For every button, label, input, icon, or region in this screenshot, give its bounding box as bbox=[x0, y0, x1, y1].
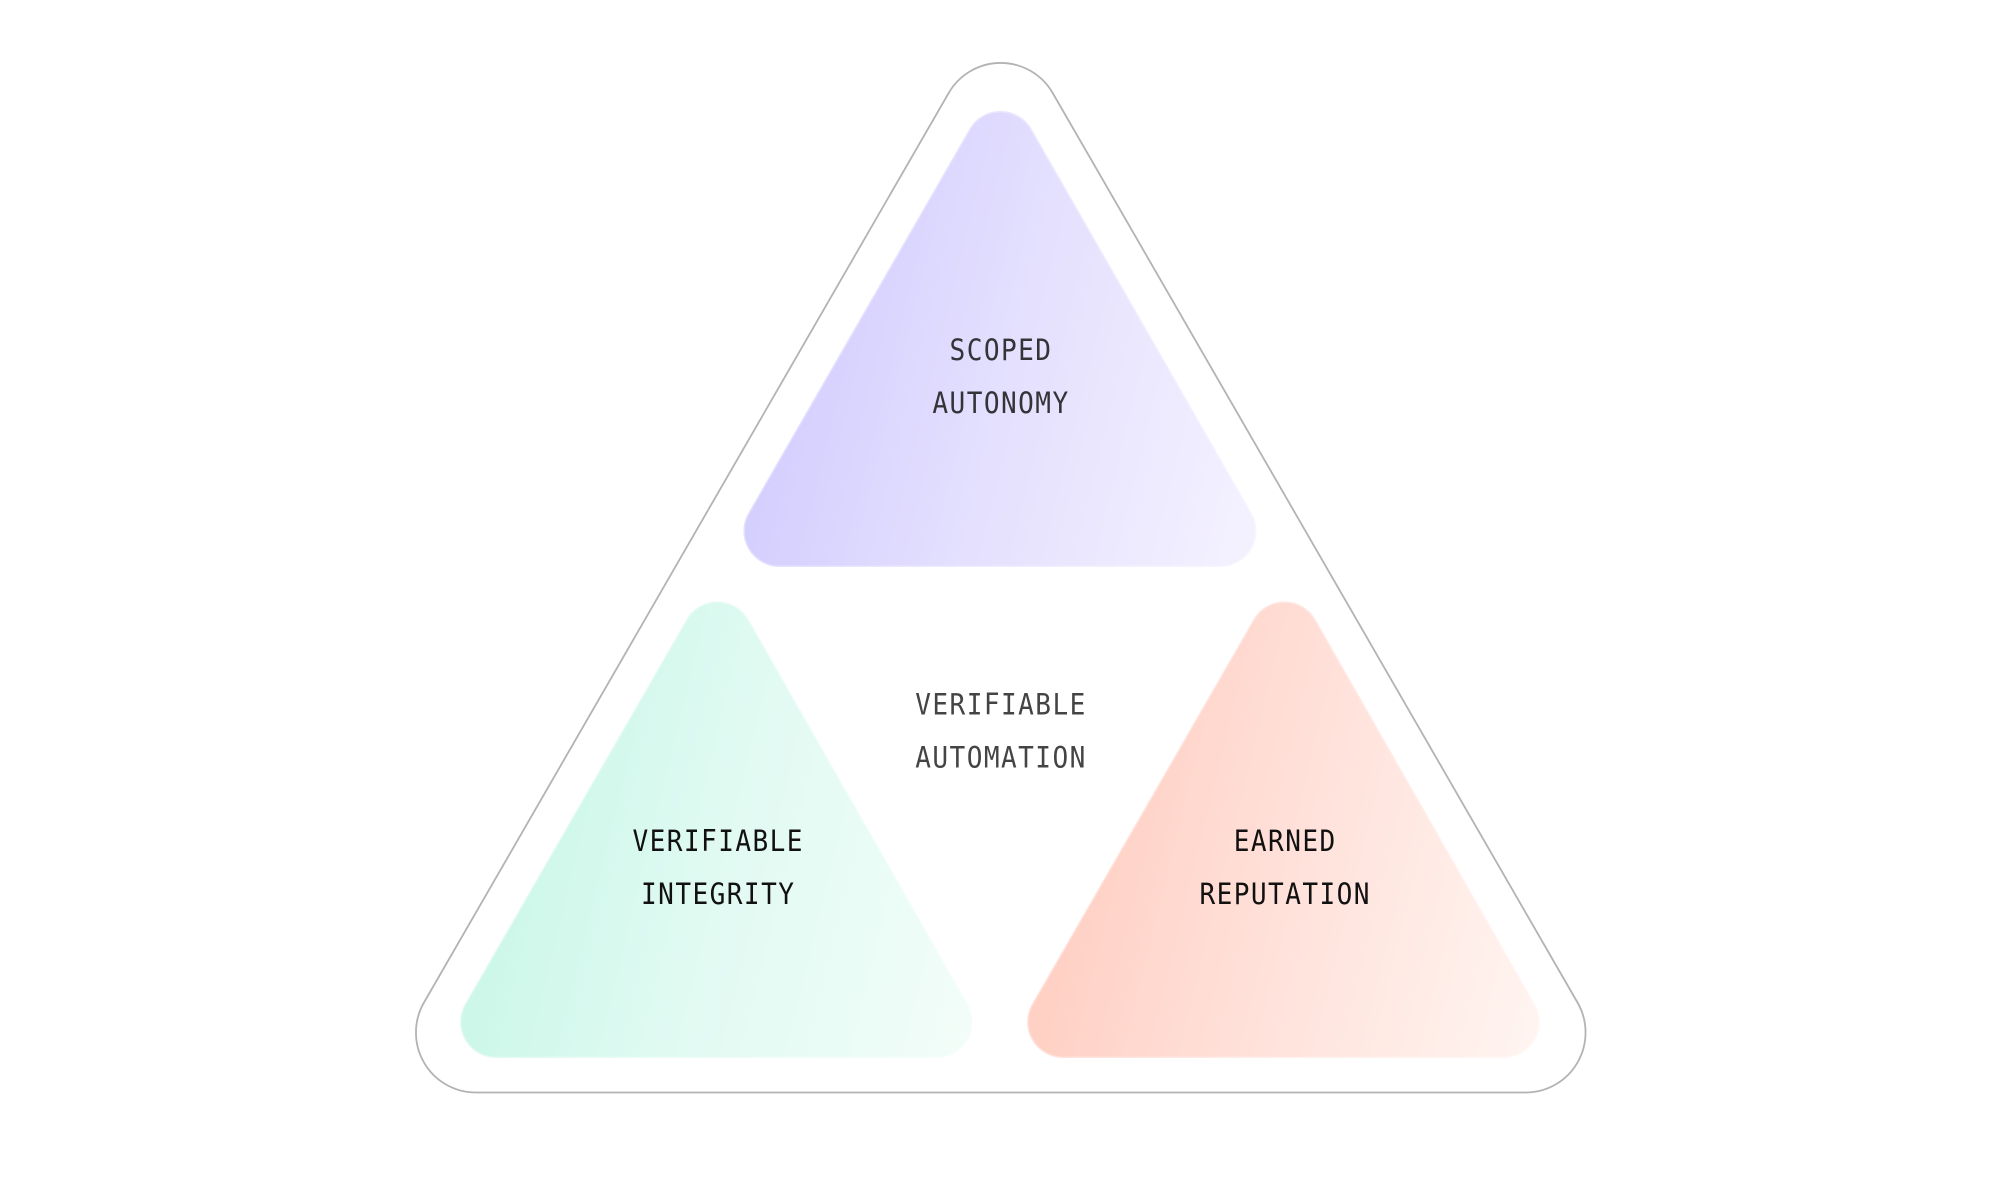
center label: verifiable automation: AUTOMATION bbox=[915, 740, 1087, 775]
label: scoped autonomy: SCOPED bbox=[950, 333, 1052, 367]
label: earned reputation: EARNED bbox=[1234, 824, 1337, 858]
label: verifiable integrity: INTEGRITY bbox=[641, 877, 795, 911]
panel: earned reputation triangle bbox=[1027, 601, 1540, 1058]
panel: scoped autonomy triangle bbox=[743, 111, 1257, 567]
center label: verifiable automation: VERIFIABLE bbox=[915, 687, 1087, 722]
label: verifiable integrity: VERIFIABLE bbox=[632, 824, 804, 858]
outer rounded triangle outline bbox=[416, 63, 1586, 1092]
panel: verifiable integrity triangle bbox=[460, 601, 973, 1058]
label: scoped autonomy: AUTONOMY bbox=[932, 386, 1070, 420]
label: earned reputation: REPUTATION bbox=[1199, 877, 1371, 911]
